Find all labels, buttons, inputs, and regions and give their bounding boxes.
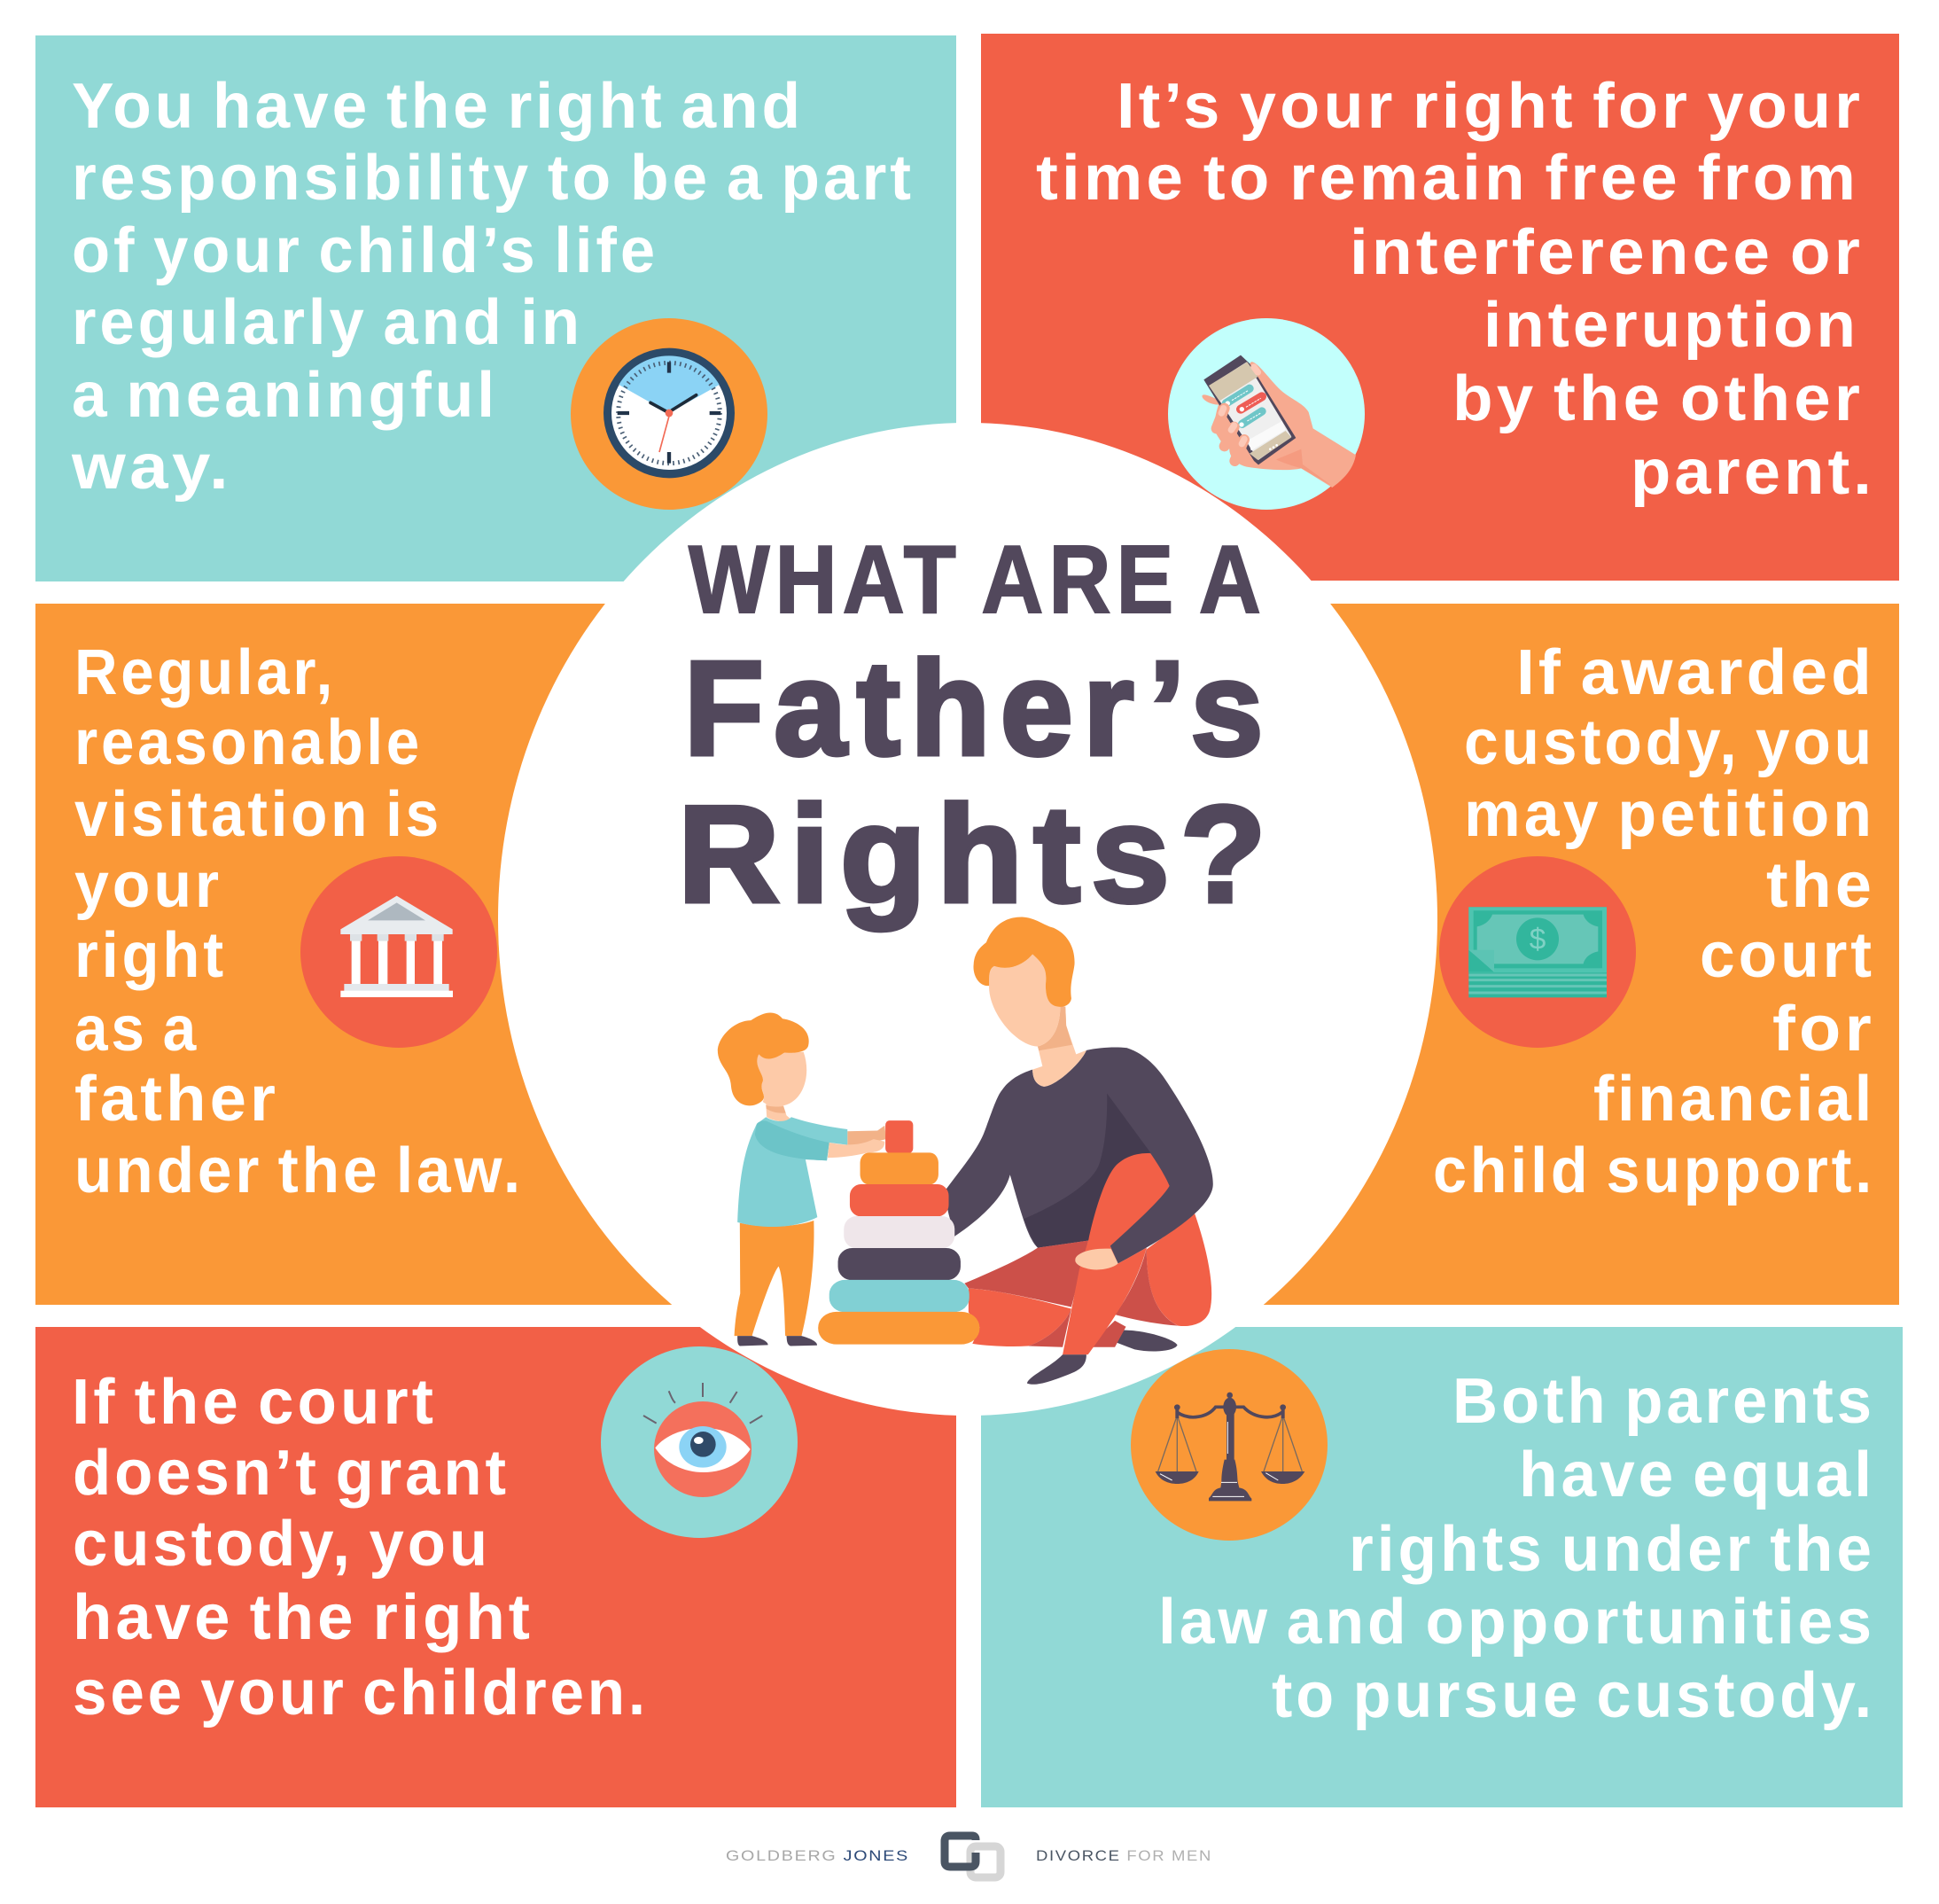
visitation text: Regular, (74, 637, 336, 708)
father (946, 917, 1213, 1385)
icon: clock (571, 318, 767, 510)
icon: courthouse (300, 856, 497, 1048)
icon: phone in hand (1168, 318, 1365, 510)
central white circle (498, 423, 1437, 1416)
see your children text (72, 1367, 649, 1728)
panel: visitation (35, 604, 727, 1305)
see your children text: doesn’t grant (73, 1438, 510, 1509)
visitation text: right (74, 920, 227, 991)
child support text: custody, you (1464, 707, 1875, 778)
equal rights text (1158, 1366, 1875, 1731)
equal rights text: law and opportunities (1158, 1587, 1875, 1658)
see your children text: custody, you (73, 1509, 491, 1580)
right 2 text: parent. (1631, 437, 1875, 508)
visitation text: father (74, 1064, 279, 1135)
panel: court does not grant custody (35, 1327, 956, 1807)
visitation text: under the law. (74, 1135, 524, 1206)
icon: money (1439, 856, 1636, 1048)
footer left text: GOLDBERG JONES (726, 1847, 909, 1864)
ring stack (818, 1120, 979, 1345)
child support text: If awarded (1516, 637, 1875, 708)
right 1 text: regularly and in (72, 287, 583, 358)
equal rights text: have equal (1519, 1440, 1875, 1510)
icon: eye (601, 1346, 798, 1538)
title: Father’s (684, 633, 1273, 783)
right 1 text (71, 71, 915, 503)
right 2 text: interuption (1483, 290, 1859, 361)
see your children text: see your children. (73, 1658, 649, 1728)
panel: equal rights (981, 1327, 1903, 1807)
title (678, 526, 1277, 931)
visitation text: your (74, 850, 222, 921)
right 1 text: way. (71, 432, 232, 503)
icon: money: $ (1530, 924, 1546, 956)
right 2 text: time to remain free from (1036, 143, 1859, 214)
right 2 text: by the other (1452, 363, 1864, 434)
visitation text (74, 637, 524, 1206)
see your children text: have the right (73, 1582, 533, 1653)
equal rights text: rights under the (1349, 1514, 1875, 1585)
icon: scales of justice (1131, 1349, 1328, 1541)
see your children text: If the court (72, 1367, 437, 1438)
child support text: child support. (1433, 1135, 1875, 1206)
panel: time free from interference (981, 34, 1899, 581)
child support text: court (1700, 920, 1875, 991)
panel: financial child support (1205, 604, 1899, 1305)
visitation text: as a (74, 994, 199, 1065)
title: WHAT ARE A (689, 526, 1266, 634)
footer logo and tagline (726, 1836, 1212, 1877)
child support text: financial (1593, 1064, 1875, 1135)
visitation text: visitation is (74, 779, 442, 850)
panel: regular part of child's life (35, 35, 956, 581)
title: Rights? (678, 777, 1277, 931)
right 1 text: You have the right and (72, 71, 804, 142)
right 2 text: interference or (1350, 217, 1864, 288)
right 2 text (1036, 71, 1875, 508)
right 1 text: a meaningful (72, 360, 498, 431)
right 1 text: of your child’s life (72, 215, 658, 286)
child (718, 1012, 886, 1346)
equal rights text: Both parents (1452, 1366, 1875, 1437)
right 1 text: responsibility to be a part (72, 143, 915, 214)
equal rights text: to pursue custody. (1272, 1660, 1875, 1731)
child support text: may petition (1464, 779, 1875, 850)
logo mark (945, 1836, 1001, 1877)
visitation text: reasonable (74, 707, 423, 778)
child support text: the (1766, 850, 1875, 921)
right 2 text: It’s your right for your (1117, 71, 1864, 142)
footer right text: DIVORCE FOR MEN (1036, 1847, 1212, 1864)
child support text (1433, 637, 1875, 1206)
child support text: for (1772, 994, 1875, 1065)
illustration: father and child stacking rings (718, 917, 1213, 1385)
